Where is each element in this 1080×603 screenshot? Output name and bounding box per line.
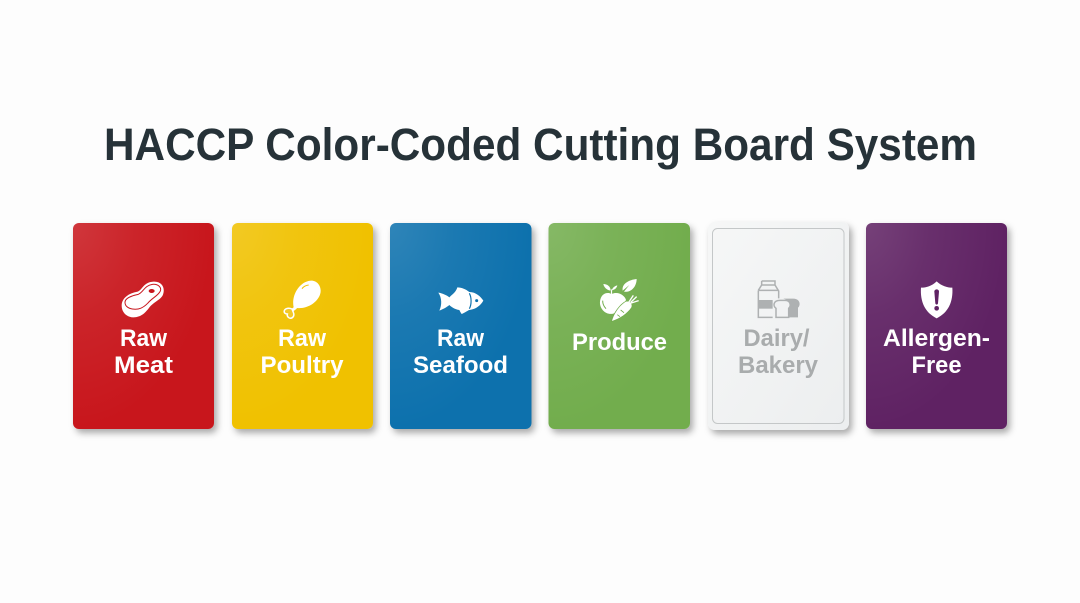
panel: raw seafood board: [390, 223, 532, 429]
label: raw poultry: [260, 325, 344, 379]
icon: apple, leaf and carrot: [600, 279, 639, 321]
panel: dairy and bakery board: [708, 222, 849, 430]
panel: produce board: [548, 223, 690, 429]
label: dairy/bakery: Dairy/: [744, 325, 810, 352]
label: dairy/bakery: Bakery: [738, 352, 818, 379]
label: produce: Produce: [572, 329, 667, 356]
icon: warning shield: [921, 281, 952, 318]
icon: milk carton and bread: [758, 281, 800, 317]
icon: drumstick: [284, 281, 321, 318]
panel: raw poultry board: [232, 223, 373, 429]
label: raw seafood: [413, 325, 508, 379]
panel: allergen-free board: [866, 223, 1007, 429]
label: dairy/bakery: [738, 325, 818, 379]
label: raw meat: [114, 325, 173, 379]
icon: steak: [122, 282, 164, 317]
label: allergen-free: Allergen-: [883, 325, 990, 352]
label: raw seafood: Seafood: [413, 352, 508, 379]
label: raw meat: Meat: [114, 352, 173, 379]
title: HACCP Color-Coded Cutting Board System: [104, 119, 977, 170]
label: raw poultry: Poultry: [260, 352, 344, 379]
label: allergen-free: [883, 325, 990, 379]
label: raw seafood: Raw: [437, 325, 485, 352]
label: raw poultry: Raw: [278, 325, 327, 352]
label: allergen-free: Free: [912, 352, 962, 379]
panel: raw meat board: [73, 223, 214, 429]
label: raw meat: Raw: [120, 325, 168, 352]
icon: fish: [438, 287, 483, 314]
